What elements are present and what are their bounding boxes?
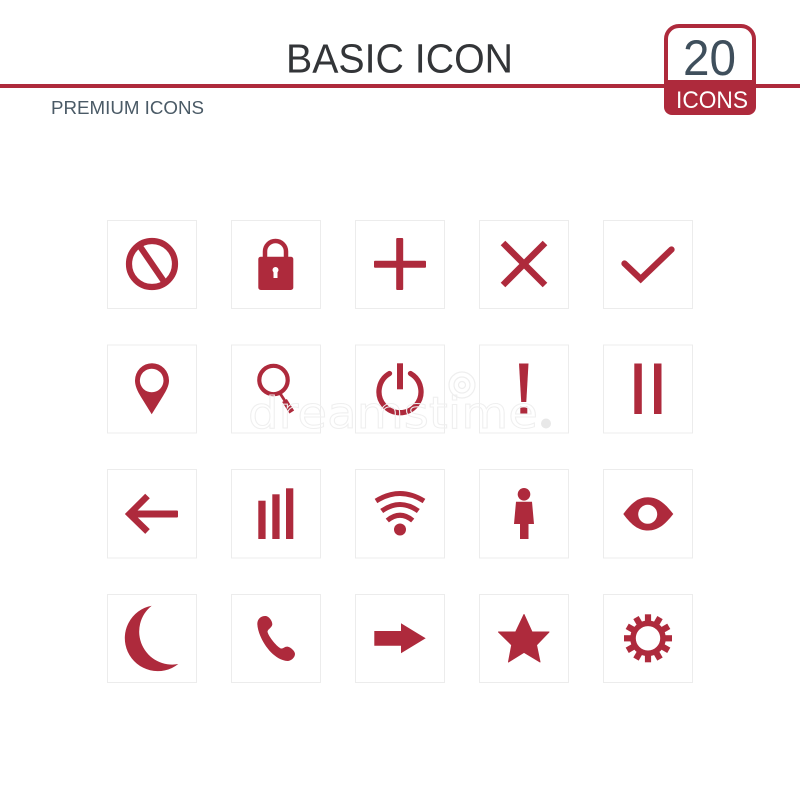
tile: map pin	[108, 345, 196, 433]
tile: wifi	[356, 470, 444, 558]
tile: exclamation mark	[480, 345, 568, 433]
tile: eye	[604, 470, 692, 558]
badge: 20 icons: ICONS	[676, 87, 748, 114]
watermark	[248, 372, 551, 439]
tile: right arrow	[356, 594, 444, 682]
badge: 20 icons: 20	[683, 30, 736, 86]
tile: power symbol	[356, 345, 444, 433]
tile: close cross	[480, 220, 568, 308]
tile: check mark	[604, 220, 692, 308]
tile: signal bars	[232, 470, 320, 558]
badge: 20 icons	[664, 26, 756, 115]
tile: person	[480, 470, 568, 558]
tile: crescent moon	[108, 594, 196, 682]
tile: magnifier	[232, 345, 320, 433]
tile: padlock	[232, 220, 320, 308]
title: BASIC ICON	[286, 36, 513, 82]
watermark: dreamstime	[248, 388, 538, 439]
tile: pause	[604, 345, 692, 433]
tile: plus	[356, 220, 444, 308]
tile: prohibited sign	[108, 220, 196, 308]
tile: phone	[232, 594, 320, 682]
tile: left arrow	[108, 470, 196, 558]
tile: star	[480, 594, 568, 682]
tile: gear	[604, 594, 692, 682]
header rule	[0, 84, 800, 88]
subtitle: PREMIUM ICONS	[51, 97, 204, 118]
